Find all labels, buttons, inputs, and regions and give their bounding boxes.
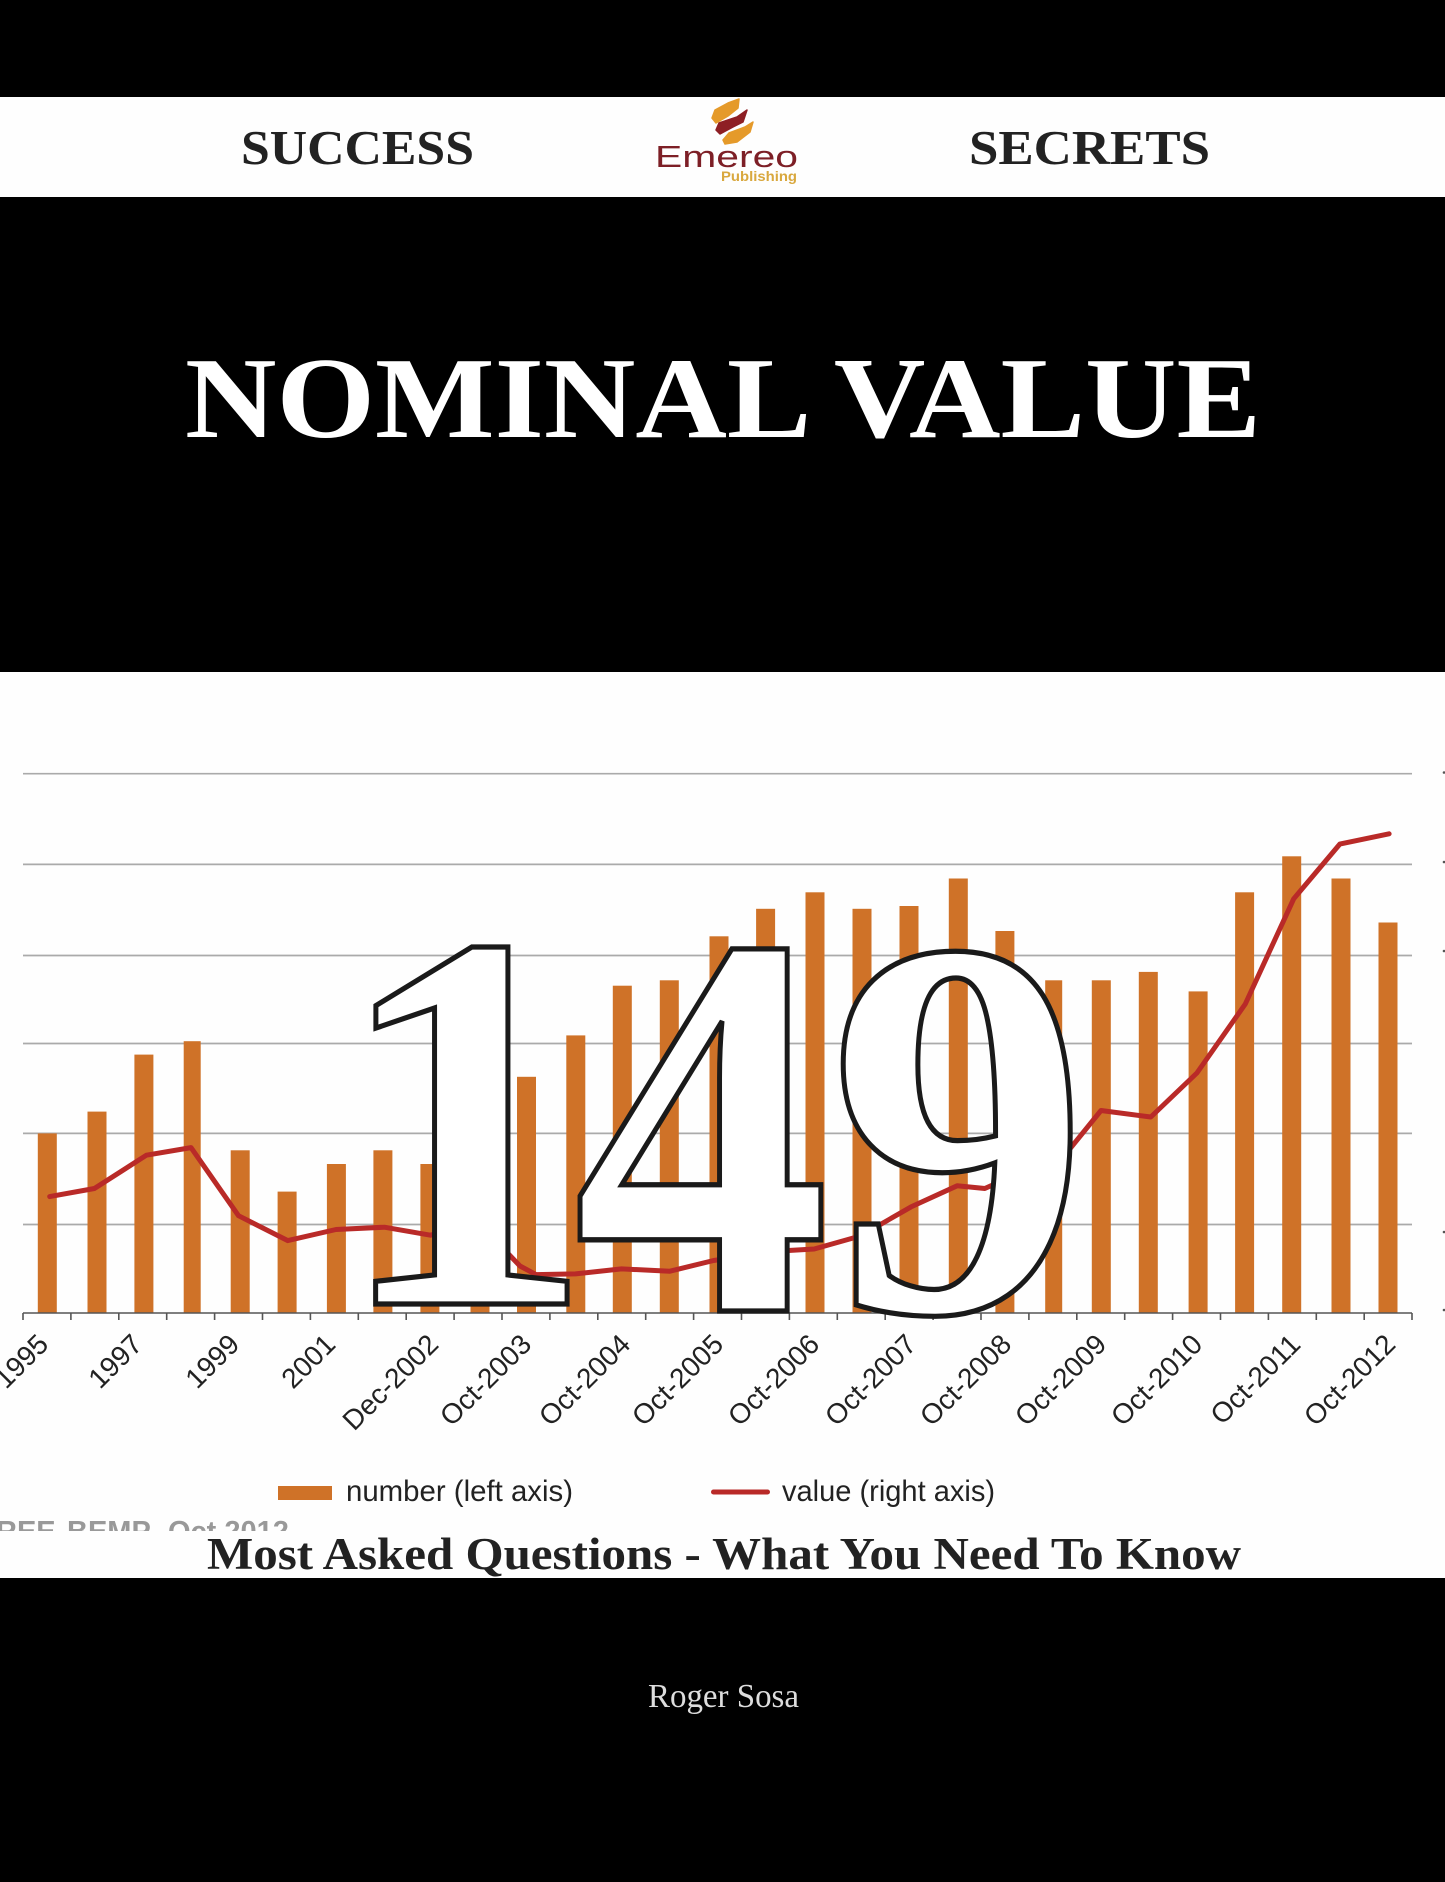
chart panel background bbox=[0, 672, 1445, 1578]
title panel bbox=[0, 197, 1445, 672]
legend: number: number (left axis) bbox=[346, 1475, 573, 1508]
x axis labels: 1999 bbox=[179, 1328, 245, 1394]
x axis labels: Oct-2009 bbox=[1009, 1328, 1112, 1432]
cropped source note: Oct 2012 bbox=[168, 1516, 289, 1548]
x axis labels: Oct-2012 bbox=[1298, 1328, 1401, 1432]
x axis labels: Dec-2002 bbox=[336, 1328, 444, 1436]
x axis labels: 2001 bbox=[275, 1328, 341, 1394]
x axis labels: Oct-2003 bbox=[434, 1328, 537, 1432]
top black band bbox=[0, 0, 1445, 97]
cropped source note: BEMP bbox=[67, 1516, 151, 1548]
line: value (right axis) bbox=[50, 834, 1389, 1275]
x axis labels: Oct-2005 bbox=[626, 1328, 729, 1432]
x axis labels bbox=[0, 1328, 1401, 1436]
logo wordmark: Emereo bbox=[655, 139, 798, 174]
x axis labels: 1997 bbox=[82, 1328, 148, 1394]
big number 149: 4 bbox=[573, 822, 830, 1431]
header strip bbox=[0, 97, 1445, 197]
icon: Emereo logo mark bbox=[712, 99, 753, 144]
big number 149: 1 bbox=[334, 822, 594, 1421]
x axis bbox=[23, 1313, 1412, 1320]
bottom band bbox=[0, 1578, 1445, 1882]
bars: number (left axis) bbox=[38, 856, 1397, 1313]
x axis labels: Oct-2006 bbox=[722, 1328, 825, 1432]
x axis labels: Oct-2004 bbox=[533, 1328, 636, 1432]
author: Roger Sosa bbox=[648, 1678, 799, 1715]
legend bbox=[278, 1475, 995, 1508]
x axis labels: Oct-2010 bbox=[1105, 1328, 1208, 1432]
main title: NOMINAL VALUE bbox=[185, 335, 1261, 463]
big number 149 bbox=[334, 822, 1089, 1431]
legend: value: value (right axis) bbox=[782, 1475, 995, 1508]
x axis labels: Oct-2008 bbox=[914, 1328, 1017, 1432]
cropped source note bbox=[0, 1520, 288, 1531]
x axis labels: Oct-2011 bbox=[1204, 1328, 1306, 1430]
heading: success: SUCCESS bbox=[241, 120, 474, 175]
subtitle: Most Asked Questions - What You Need To Know bbox=[207, 1529, 1242, 1579]
heading: secrets: SECRETS bbox=[969, 120, 1210, 175]
logo subtitle: Publishing bbox=[721, 168, 797, 184]
big number 149: 9 bbox=[829, 828, 1089, 1430]
cropped right axis marks bbox=[1443, 771, 1445, 1311]
combo chart bbox=[0, 771, 1445, 1436]
x axis labels: Oct-2007 bbox=[819, 1328, 922, 1432]
